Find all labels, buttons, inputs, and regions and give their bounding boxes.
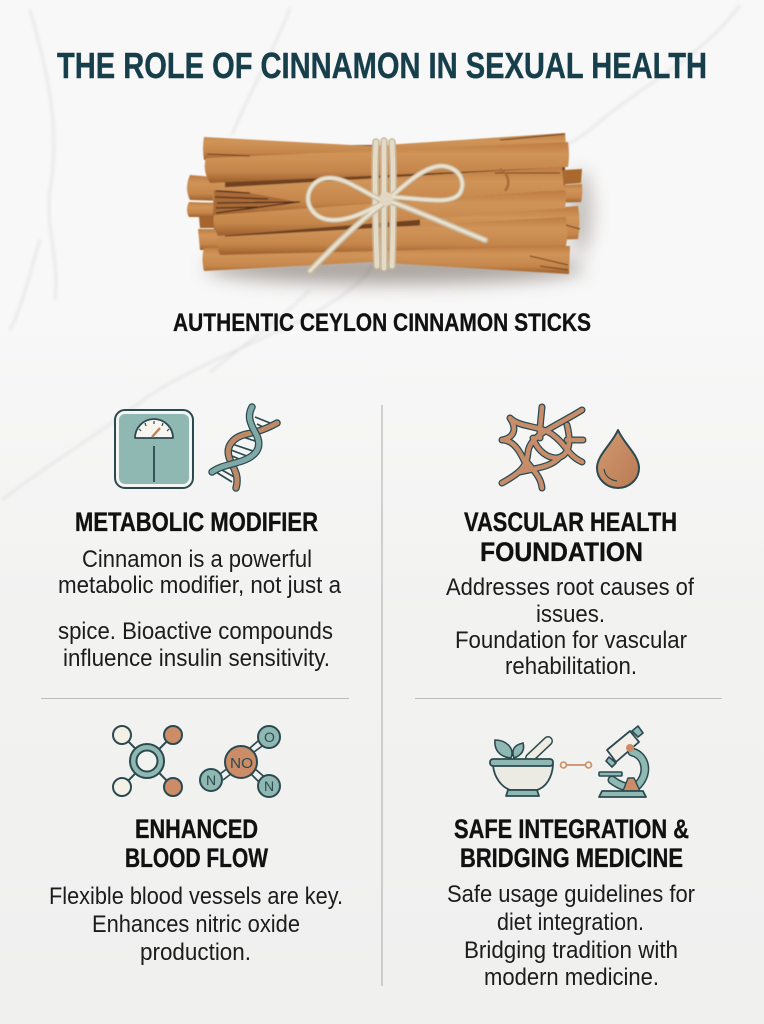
panel: safe integration and bridging medicine <box>447 726 695 991</box>
icon: nitric oxide molecule: N <box>264 778 274 794</box>
body text: Safe usage guidelines for <box>447 881 695 908</box>
icon: mortar and pestle with herbs <box>490 740 553 796</box>
body text <box>49 883 343 966</box>
icon: nitric oxide molecule <box>200 726 280 797</box>
body text <box>447 881 695 991</box>
horizontal divider right <box>415 698 722 699</box>
body text: Enhances nitric oxide <box>92 911 300 938</box>
heading <box>454 814 689 873</box>
heading: FOUNDATION <box>480 537 643 567</box>
icon: nitric oxide molecule: N <box>206 772 216 788</box>
heading <box>125 814 268 873</box>
vertical divider <box>382 405 383 986</box>
body text: influence insulin sensitivity. <box>63 645 330 672</box>
body text: Bridging tradition with <box>464 937 678 964</box>
body text <box>446 574 694 680</box>
image: bundle of cinnamon sticks tied with twine <box>187 133 592 284</box>
body text <box>58 546 342 672</box>
heading: BLOOD FLOW <box>125 843 268 873</box>
body text: issues. <box>536 601 605 628</box>
heading: BRIDGING MEDICINE <box>460 843 683 873</box>
icon: molecule <box>113 726 182 796</box>
panel: vascular health foundation <box>446 407 694 680</box>
icon: nitric oxide molecule: NO <box>230 755 253 772</box>
body text: production. <box>140 939 251 966</box>
body text: Addresses root causes of <box>446 574 694 601</box>
body text: Cinnamon is a powerful <box>82 546 312 573</box>
body text: rehabilitation. <box>505 653 637 680</box>
horizontal divider left <box>41 698 349 699</box>
panel: metabolic modifier <box>58 407 342 672</box>
heading: SAFE INTEGRATION & <box>454 814 689 844</box>
panel: enhanced blood flow <box>49 726 343 966</box>
heading: ENHANCED <box>135 814 258 844</box>
icon: blood vessel network <box>502 407 583 488</box>
icon: microscope <box>599 726 646 797</box>
heading: VASCULAR HEALTH <box>464 507 677 537</box>
icon: weighing scale <box>115 410 193 488</box>
body text: Flexible blood vessels are key. <box>49 883 343 910</box>
body text: spice. Bioactive compounds <box>58 618 333 645</box>
body text: Foundation for vascular <box>455 627 687 654</box>
heading <box>464 507 677 567</box>
caption: AUTHENTIC CEYLON CINNAMON STICKS <box>173 309 591 337</box>
body text: modern medicine. <box>484 964 659 991</box>
body text: metabolic modifier, not just a <box>58 572 342 599</box>
body text: diet integration. <box>497 909 644 936</box>
heading: METABOLIC MODIFIER <box>75 507 318 537</box>
icon: blood drop <box>597 430 639 488</box>
icon: DNA helix <box>212 407 277 488</box>
icon: nitric oxide molecule: O <box>264 729 275 745</box>
icon: connector link <box>560 762 592 768</box>
